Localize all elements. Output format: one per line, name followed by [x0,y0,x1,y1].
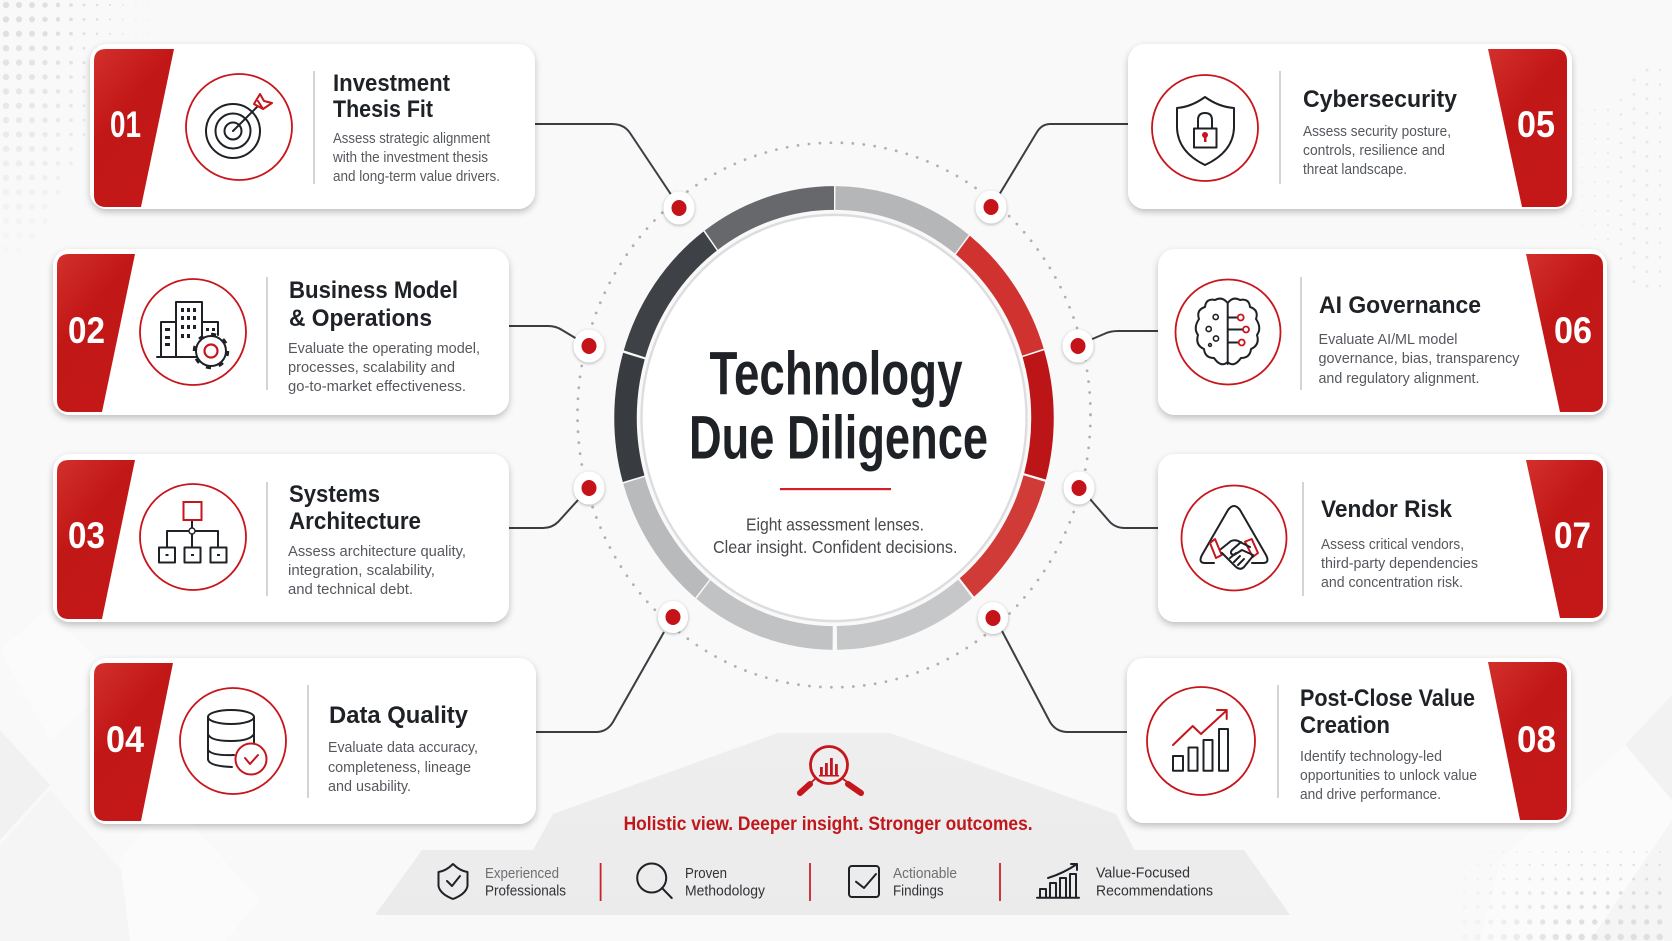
connector lines [509,124,1158,732]
feature: actionable findings: Actionable [893,866,957,882]
icon: target [186,74,292,180]
heading: Thesis Fit [333,96,433,123]
description: go-to-market effectiveness. [288,379,466,395]
number 04: 04 [106,719,144,760]
slogan: Holistic view. Deeper insight. Stronger outcomes. [624,814,1033,835]
heading: & Operations [289,305,432,332]
description: and technical debt. [288,582,413,598]
description [1321,537,1478,591]
description: Assess critical vendors, [1321,537,1464,553]
feature: value-focused recommendations [1037,864,1213,900]
feature: experienced professionals: Experienced [485,866,559,882]
center red rule [780,488,891,490]
number 01: 01 [110,104,141,145]
center subtitle [713,515,958,557]
description: threat landscape. [1303,162,1407,178]
number 02: 02 [68,310,105,351]
icon: shield lock [1152,75,1258,181]
number 06: 06 [1554,310,1592,351]
description: and concentration risk. [1321,575,1463,591]
heading: Post-Close Value [1300,685,1475,712]
icon: red magnifier with bars [800,746,861,793]
number 05: 05 [1517,104,1555,145]
icon: brain circuit [1176,280,1280,384]
description [328,740,478,795]
heading [1300,685,1475,739]
heading: Architecture [289,508,421,535]
center subtitle: Eight assessment lenses. [746,515,924,535]
heading: Cybersecurity [1303,86,1458,113]
panel: 08 Post-Close Value Creation [1127,658,1571,823]
center title: Technology [710,340,963,408]
feature: actionable findings: Findings [893,884,944,900]
icon: buildings and gear [140,279,246,385]
heading: Business Model [289,277,458,304]
description [1303,124,1451,178]
heading: Investment [333,70,450,97]
dot pattern: top right [1582,70,1660,300]
heading: AI Governance [1319,292,1481,319]
heading: Vendor Risk [1321,496,1453,523]
description: processes, scalability and [288,360,455,376]
footer pedestal [375,733,1290,915]
icon: database check [180,688,286,794]
description [288,341,480,395]
feature: value-focused recommendations: Recommendations [1096,884,1213,900]
description: Assess architecture quality, [288,544,466,560]
description: and regulatory alignment. [1318,371,1480,387]
feature: value-focused recommendations: Value-Focused [1096,866,1190,882]
description [1300,749,1477,803]
panel: 03 Systems Architecture [53,454,509,622]
heading [289,481,421,535]
feature: proven methodology: Proven [685,866,727,882]
heading: Data Quality [329,702,469,729]
description: completeness, lineage [328,760,471,776]
description [332,131,500,185]
description: governance, bias, transparency [1318,351,1520,367]
number 07: 07 [1554,515,1591,556]
heading: Creation [1300,712,1390,739]
icon: magnifier [637,864,672,898]
panel: 02 Business Model & Operations [53,249,509,415]
icon: shield check [438,864,468,899]
connector nodes [574,190,1094,634]
number 03: 03 [68,515,105,556]
description: Assess security posture, [1303,124,1451,140]
heading [289,277,458,332]
description: Identify technology-led [1300,749,1442,765]
panel: 04 Data Quality [90,658,536,824]
central ring [626,198,1042,638]
panel: 01 Investment Thesis Fit [90,44,535,209]
number 08: 08 [1517,719,1556,760]
description [1318,332,1520,387]
dot pattern: top left [2,2,150,190]
heading: Systems [289,481,380,508]
description: Evaluate the operating model, [288,341,480,357]
feature: experienced professionals: Professionals [485,884,566,900]
feature: proven methodology [637,864,766,900]
icon: hierarchy [140,484,246,590]
description: Assess strategic alignment [333,131,490,147]
panel: 07 Vendor Risk [1158,454,1607,622]
icon: checkbox [849,866,879,897]
center title: Due Diligence [689,404,988,472]
dotted orbit [578,143,1090,687]
description: controls, resilience and [1303,143,1445,159]
icon: rising chart [1147,687,1255,795]
panel: 05 Cybersecurity [1128,44,1572,209]
center subtitle: Clear insight. Confident decisions. [713,537,958,557]
description: opportunities to unlock value [1300,768,1477,784]
panel: 06 AI Governance [1158,249,1607,415]
feature: actionable findings [849,866,957,900]
description: with the investment thesis [332,150,488,166]
icon: growth bars [1037,864,1079,898]
icon: handshake triangle [1182,486,1286,590]
feature: proven methodology: Methodology [685,884,766,900]
description: Evaluate AI/ML model [1318,332,1458,348]
description: Evaluate data accuracy, [328,740,478,756]
description: and drive performance. [1300,787,1441,803]
dot pattern: bottom right [1488,851,1663,940]
description: and long-term value drivers. [333,169,500,185]
description [288,544,466,598]
description: and usability. [328,779,411,795]
description: integration, scalability, [288,563,435,579]
feature: experienced professionals [438,864,566,900]
center title [689,340,988,472]
description: third-party dependencies [1321,556,1478,572]
heading [333,70,450,123]
